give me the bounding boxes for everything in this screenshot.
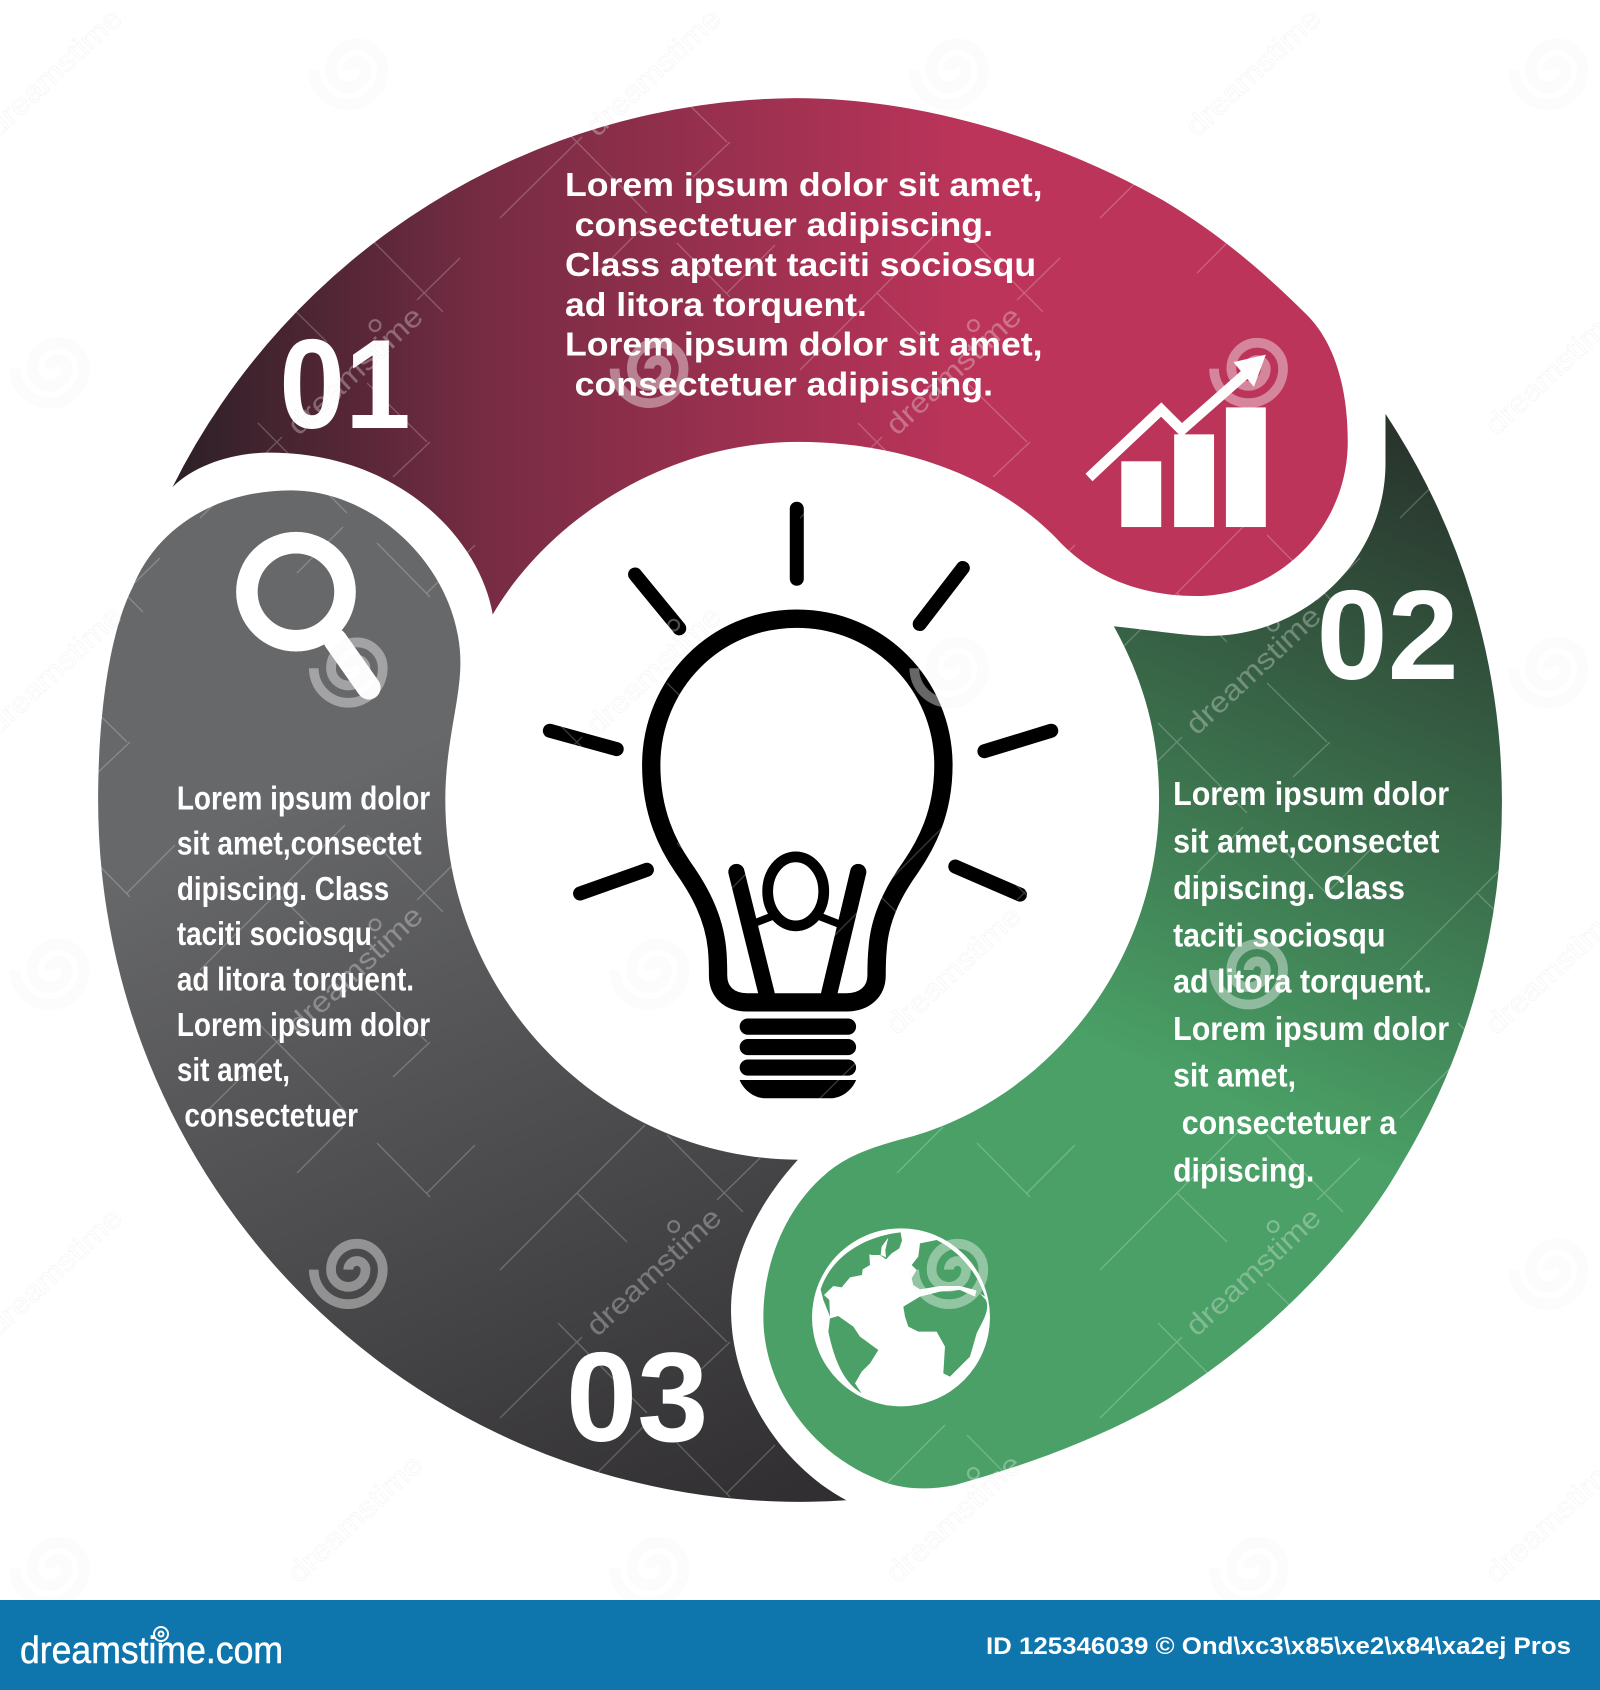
panel 03: grey segment xyxy=(98,490,846,1502)
text block: green panel: consectetuer a xyxy=(1182,1105,1397,1142)
text block: green panel: dipiscing. xyxy=(1173,1152,1314,1189)
icon: magnifying glass xyxy=(247,543,369,688)
text block: grey panel: Lorem ipsum dolor xyxy=(177,780,430,817)
text block: green panel: taciti sociosqu xyxy=(1173,917,1385,954)
footer bar xyxy=(0,1600,1600,1690)
text block: grey panel xyxy=(177,780,430,1134)
text block: green panel: Lorem ipsum dolor xyxy=(1173,776,1449,813)
watermark overlay: dreamstime xyxy=(580,600,728,741)
text block: green panel: sit amet,consectet xyxy=(1173,824,1439,861)
icon: globe xyxy=(812,1228,990,1406)
text block: grey panel: taciti sociosqu xyxy=(177,916,372,953)
watermark overlay: dreamstime xyxy=(1180,2,1328,143)
watermark overlay: dreamstime xyxy=(880,900,1028,1041)
watermark overlay: dreamstime xyxy=(1180,600,1328,741)
text block: green panel: dipiscing. Class xyxy=(1173,870,1405,907)
watermark overlay: dreamstime xyxy=(580,2,728,143)
footer logo text: dreamstime.com xyxy=(20,1630,283,1672)
number 01: 01 xyxy=(279,313,411,455)
text block: green panel: Lorem ipsum dolor xyxy=(1173,1011,1449,1048)
text block: red panel: Class aptent taciti sociosqu xyxy=(565,247,1036,284)
text block: red panel: consectetuer adipiscing. xyxy=(575,367,993,404)
text block: green panel: ad litora torquent. xyxy=(1173,964,1432,1001)
text block: grey panel: sit amet,consectet xyxy=(177,826,422,863)
icon: rising bar chart with arrow xyxy=(1089,355,1266,527)
watermark overlay: dreamstime xyxy=(282,1448,430,1589)
text block: grey panel: consectetuer xyxy=(184,1097,358,1134)
text block: grey panel: dipiscing. Class xyxy=(177,871,389,908)
footer logo spiral xyxy=(154,1627,168,1641)
text block: red panel xyxy=(565,167,1043,404)
text block: grey panel: sit amet, xyxy=(177,1052,290,1089)
icon: light bulb xyxy=(550,509,1051,1098)
text block: red panel: Lorem ipsum dolor sit amet, xyxy=(565,167,1043,204)
watermark overlay: dreamstime xyxy=(1180,1202,1328,1343)
footer image id: ID 125346039 © Ond\xc3\x85\xe2\x84\xa2ej Pros xyxy=(986,1633,1571,1660)
watermark overlay: dreamstime xyxy=(880,1448,1028,1589)
panel 02: green segment xyxy=(763,414,1502,1488)
text block: grey panel: Lorem ipsum dolor xyxy=(177,1007,430,1044)
watermark overlay: dreamstime xyxy=(282,900,430,1041)
text block: green panel xyxy=(1173,776,1449,1189)
infographic cycle diagram xyxy=(98,98,1502,1502)
watermark overlay: dreamstime xyxy=(282,301,430,442)
number 02: 02 xyxy=(1316,564,1459,706)
text block: green panel: sit amet, xyxy=(1173,1057,1296,1094)
panel 01: red segment xyxy=(173,98,1348,614)
number 03: 03 xyxy=(566,1326,708,1468)
watermark overlay: dreamstime xyxy=(580,1202,728,1343)
text block: grey panel: ad litora torquent. xyxy=(177,962,414,998)
text block: red panel: consectetuer adipiscing. xyxy=(575,207,993,244)
text block: red panel: Lorem ipsum dolor sit amet, xyxy=(565,327,1043,364)
text block: red panel: ad litora torquent. xyxy=(565,287,867,324)
watermark overlay: dreamstime xyxy=(880,301,1028,442)
